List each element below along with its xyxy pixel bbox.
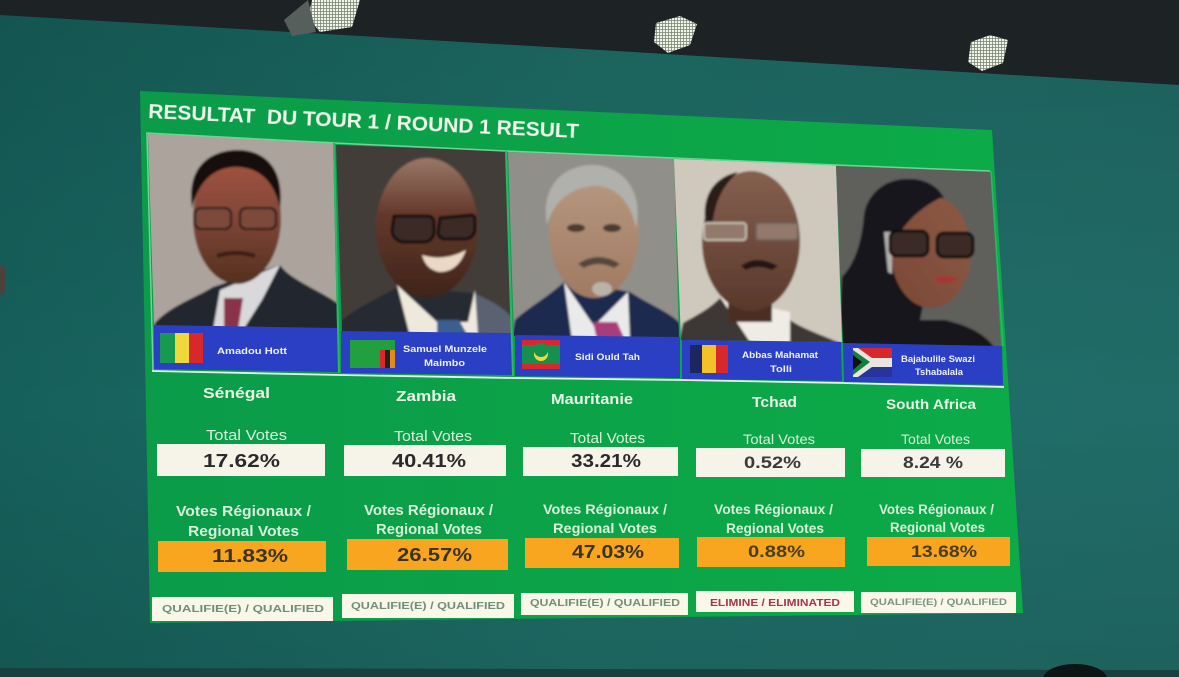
panel: candidate Amadou Hott: [140, 125, 340, 621]
status: qualified: [521, 593, 688, 615]
total votes: 0.52%: [696, 431, 845, 477]
regional votes: 47.03%: Regional Votes: [553, 520, 657, 536]
regional votes: 11.83%: [158, 504, 326, 572]
regional votes: 0.88%: [697, 502, 845, 567]
regional votes: 26.57%: Regional Votes: [376, 522, 482, 538]
regional votes: 47.03%: Votes Régionaux /: [543, 501, 667, 517]
status: qualified: [861, 592, 1016, 613]
country: Tchad: Tchad: [752, 395, 797, 411]
panel: results board: [140, 91, 1023, 623]
name bar: Sidi Ould Tah: [515, 335, 680, 378]
status: qualified: [152, 597, 333, 621]
name bar: Samuel Munzele Maimbo: [341, 331, 512, 375]
total votes: 33.21%: [523, 431, 678, 476]
total votes: 0.52%: 0.52%: [744, 453, 801, 472]
total votes: 17.62%: 17.62%: [203, 450, 280, 471]
regional votes: 11.83%: Votes Régionaux /: [176, 504, 311, 520]
portrait: Abbas Mahamat Tolli: [674, 159, 842, 342]
total votes: 40.41%: [344, 428, 506, 476]
name bar: Abbas Mahamat Tolli: Abbas Mahamat: [742, 350, 818, 360]
name bar: Sidi Ould Tah: Sidi Ould Tah: [575, 352, 640, 362]
panel: candidate Bajabulile Swazi Tshabalala: [830, 160, 1016, 613]
total votes: 40.41%: Total Votes: [394, 428, 472, 445]
portrait: Samuel Munzele Maimbo: [336, 145, 511, 333]
name bar: Bajabulile Swazi Tshabalala: Bajabulile Swazi: [901, 354, 975, 364]
regional votes: 47.03%: [525, 501, 679, 568]
panel: candidate Abbas Mahamat Tolli: [668, 150, 854, 612]
name bar: Samuel Munzele Maimbo: Maimbo: [424, 358, 466, 368]
total votes: 8.24 %: [861, 431, 1005, 477]
panel: candidate Samuel Munzele Maimbo: [330, 140, 520, 618]
total votes: 8.24 %: Total Votes: [901, 431, 970, 447]
title: RESULTAT DU TOUR 1 / ROUND 1 RESULT: [148, 101, 579, 143]
regional votes: 0.88%: 0.88%: [748, 542, 805, 561]
regional votes: 0.88%: Votes Régionaux /: [714, 502, 833, 517]
name bar: Abbas Mahamat Tolli: Tolli: [770, 364, 792, 374]
regional votes: 26.57%: 26.57%: [397, 544, 472, 565]
country: Zambia: Zambia: [396, 388, 457, 405]
regional votes: 13.68%: [867, 502, 1010, 566]
panel: candidate Sidi Ould Tah: [500, 145, 688, 615]
regional votes: 26.57%: [347, 503, 508, 570]
total votes: 8.24 %: 8.24 %: [903, 453, 963, 472]
regional votes: 11.83%: 11.83%: [212, 545, 288, 566]
status: qualified: [342, 594, 514, 618]
total votes: 33.21%: 33.21%: [571, 451, 641, 471]
icon: ceiling lights: [284, 0, 1008, 71]
portrait: Amadou Hott: [148, 134, 337, 328]
regional votes: 13.68%: Regional Votes: [890, 520, 985, 535]
regional votes: 11.83%: Regional Votes: [188, 524, 299, 540]
total votes: 17.62%: Total Votes: [206, 427, 287, 444]
name bar: Bajabulile Swazi Tshabalala: Tshabalala: [915, 367, 964, 377]
total votes: 0.52%: Total Votes: [743, 431, 815, 447]
name bar: Bajabulile Swazi Tshabalala: [843, 343, 1003, 385]
portrait: Sidi Ould Tah: [508, 152, 679, 337]
regional votes: 0.88%: Regional Votes: [726, 521, 824, 536]
status: qualified: QUALIFIE(E) / QUALIFIED: [351, 600, 506, 612]
total votes: 17.62%: [157, 427, 325, 476]
status: eliminated: [696, 591, 854, 612]
status: qualified: QUALIFIE(E) / QUALIFIED: [530, 598, 680, 609]
regional votes: 26.57%: Votes Régionaux /: [364, 503, 493, 519]
country: Mauritanie: Mauritanie: [551, 392, 633, 408]
regional votes: 13.68%: 13.68%: [911, 543, 977, 561]
name bar: Samuel Munzele Maimbo: Samuel Munzele: [403, 344, 487, 354]
regional votes: 13.68%: Votes Régionaux /: [879, 502, 994, 517]
country: South Africa: South Africa: [886, 396, 976, 412]
status: qualified: QUALIFIE(E) / QUALIFIED: [870, 597, 1007, 608]
name bar: Abbas Mahamat Tolli: [682, 340, 842, 381]
status: eliminated: ELIMINE / ELIMINATED: [710, 598, 840, 609]
total votes: 33.21%: Total Votes: [570, 431, 645, 447]
name bar: Amadou Hott: [154, 325, 338, 372]
total votes: 40.41%: 40.41%: [392, 450, 466, 471]
regional votes: 47.03%: 47.03%: [572, 542, 644, 562]
status: qualified: QUALIFIE(E) / QUALIFIED: [162, 603, 325, 615]
country: Sénégal: Sénégal: [203, 385, 270, 402]
name bar: Amadou Hott: Amadou Hott: [217, 346, 287, 356]
portrait: Bajabulile Swazi Tshabalala: [836, 166, 1001, 346]
